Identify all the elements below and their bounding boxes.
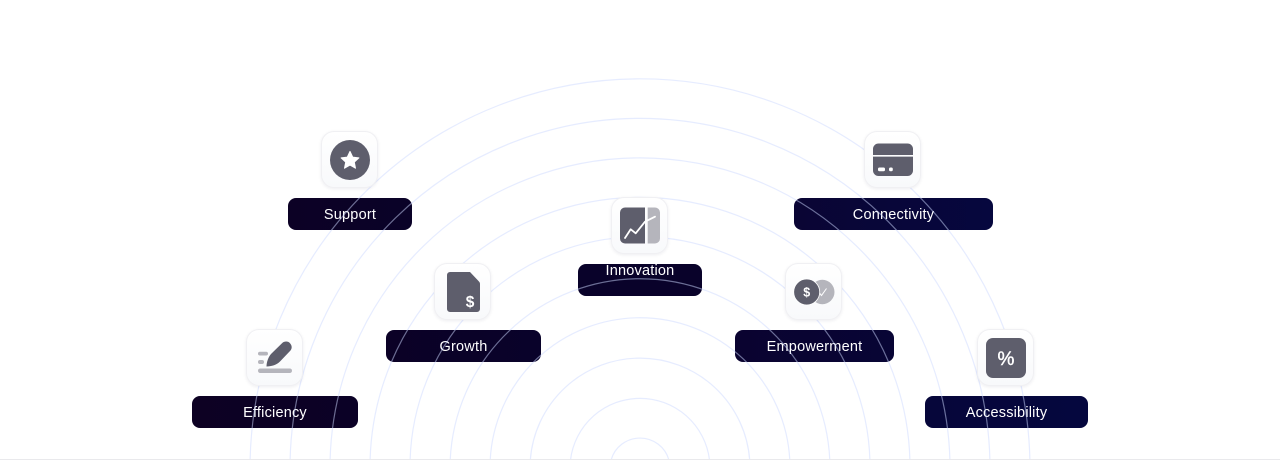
label: Connectivity: Connectivity — [853, 207, 934, 223]
icon: chart panel — [611, 197, 668, 254]
label: Efficiency — [192, 396, 358, 428]
icon: credit card — [864, 131, 921, 188]
label: Innovation: Innovation — [606, 263, 674, 279]
icon: dollar document — [434, 263, 491, 320]
label: Innovation — [578, 264, 702, 296]
label: Accessibility — [925, 396, 1088, 428]
label: Support: Support — [324, 207, 376, 223]
icon: star badge — [321, 131, 378, 188]
icon: pen and lines — [246, 329, 303, 386]
label: Support — [288, 198, 412, 230]
label: Growth — [386, 330, 541, 362]
icon: dollar document: $ — [466, 294, 475, 311]
label: Accessibility: Accessibility — [966, 405, 1047, 421]
label: Connectivity — [794, 198, 993, 230]
icon: percent — [977, 329, 1034, 386]
label: Empowerment — [735, 330, 894, 362]
label: Empowerment: Empowerment — [767, 339, 862, 355]
icon: percent: % — [998, 349, 1015, 370]
label: Efficiency: Efficiency — [243, 405, 307, 421]
icon: coins — [785, 263, 842, 320]
label: Growth: Growth — [440, 339, 487, 355]
icon: coins: $ — [803, 286, 810, 300]
